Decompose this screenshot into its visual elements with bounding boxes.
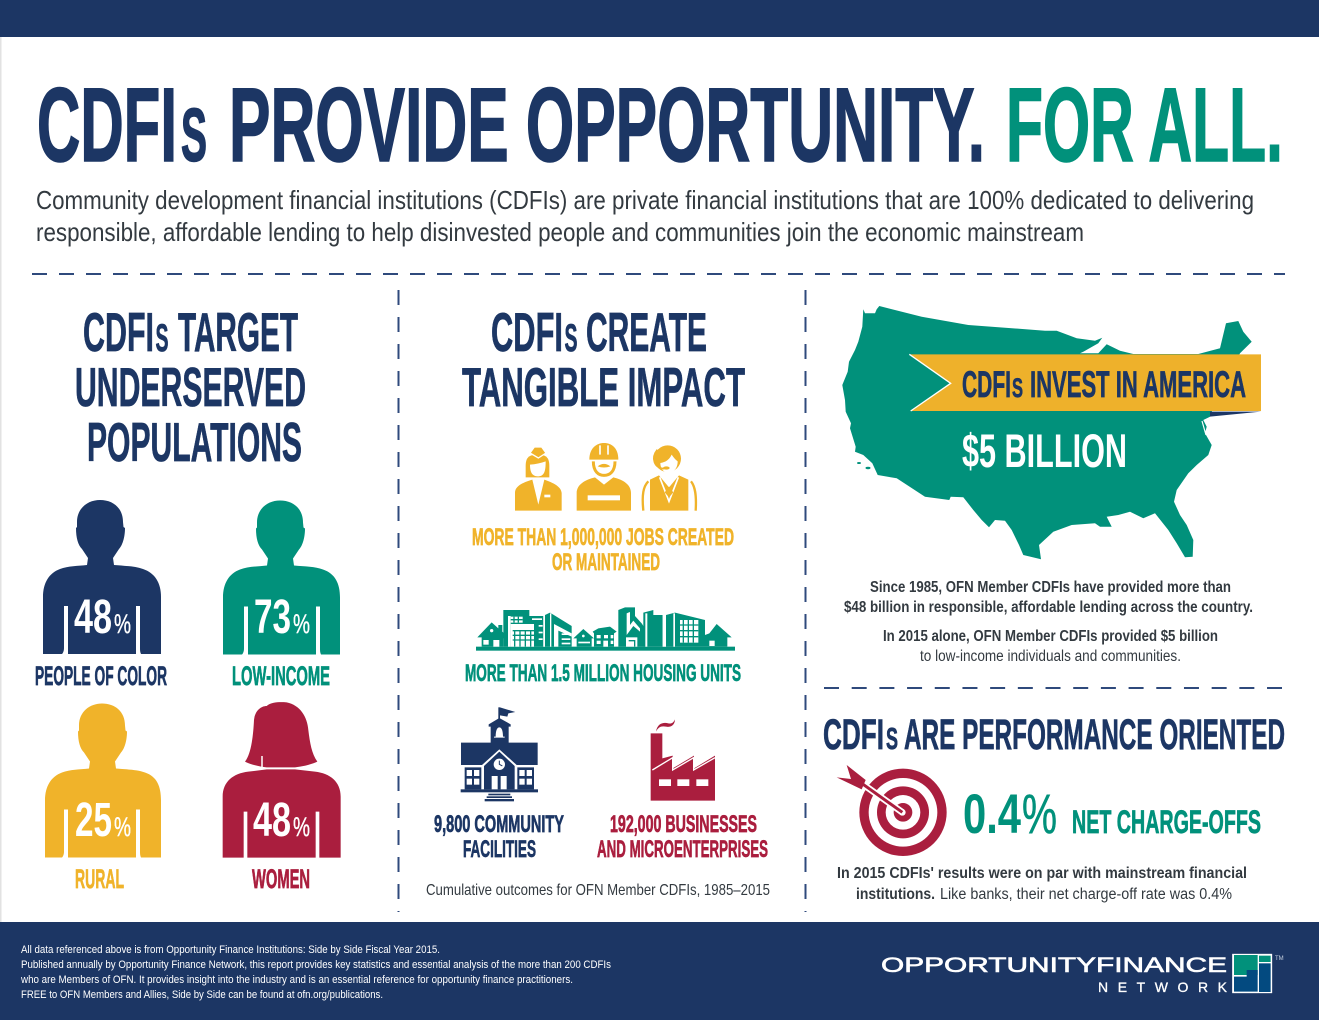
- footer text: All data referenced above is from Opportunity Finance Institutions: Side by Side Fiscal Year 2015.: [21, 944, 440, 956]
- intro text: [36, 185, 1254, 247]
- stat: low-income 73%: [223, 500, 340, 691]
- text: lending summary: to low-income individuals and communities.: [920, 648, 1181, 665]
- logo: Opportunity Finance Network: OPPORTUNITYFINANCE: [881, 954, 1227, 977]
- panel: tangible impact: [426, 301, 770, 899]
- label: businesses: AND MICROENTERPRISES: [597, 836, 768, 863]
- stat: women 48%: 48: [253, 794, 291, 847]
- text: performance note: Like banks, their net charge-off rate was 0.4%: [940, 886, 1232, 903]
- footer text: Published annually by Opportunity Finance Network, this report provides key statistics and essential analysis of the more than 200 CDFIs: [21, 959, 611, 971]
- heading: performance oriented: S: [886, 721, 898, 756]
- figure: 0.4%: 0.4: [963, 782, 1021, 845]
- stat: women 48%: %: [293, 812, 310, 842]
- heading: target underserved populations: UNDERSERVED: [75, 356, 306, 418]
- footer band: [0, 922, 1319, 1020]
- stat: people of color 48%: [35, 500, 167, 691]
- text: lending summary: [844, 579, 1253, 665]
- stat: women 48%: WOMEN: [252, 864, 310, 894]
- heading: target underserved populations: S: [156, 317, 168, 360]
- panel: target populations: [35, 301, 341, 894]
- icon: three workers: [515, 443, 696, 511]
- text: performance note: institutions.: [856, 886, 935, 903]
- map: United States: [842, 306, 1252, 559]
- stat: low-income 73%: %: [293, 609, 310, 639]
- stat: low-income 73%: 73: [254, 591, 291, 644]
- banner text: [962, 364, 1246, 405]
- label: community facilities: [434, 811, 564, 863]
- logo: Opportunity Finance Network: TM: [1275, 956, 1284, 962]
- heading: target underserved populations: [75, 301, 306, 473]
- stat: low-income 73%: LOW-INCOME: [232, 661, 330, 691]
- title: S: [181, 93, 207, 177]
- heading: tangible impact: TANGIBLE IMPACT: [462, 356, 745, 418]
- label: community facilities: 9,800 COMMUNITY: [434, 811, 564, 838]
- intro text: responsible, affordable lending to help disinvested people and communities join the economic mainstream: [36, 217, 1084, 247]
- banner: CDFIs invest in America: [909, 354, 1261, 417]
- icon: school building: [461, 707, 538, 801]
- stat: people of color 48%: PEOPLE OF COLOR: [35, 661, 167, 691]
- stat: rural 25%: %: [114, 812, 131, 842]
- heading: target underserved populations: POPULATIONS: [87, 411, 302, 473]
- heading: tangible impact: CREATE: [586, 301, 707, 363]
- stat: people of color 48%: 48: [74, 591, 112, 644]
- stat: women 48%: [223, 702, 341, 894]
- footer text: [20, 944, 611, 1001]
- banner text: S: [1012, 373, 1023, 403]
- label: housing units: MORE THAN 1.5 MILLION HOUSING UNITS: [465, 660, 741, 687]
- label: jobs: [472, 524, 734, 576]
- heading: tangible impact: S: [564, 317, 578, 360]
- icon: target with arrow: [837, 765, 947, 856]
- label: community facilities: FACILITIES: [463, 836, 536, 863]
- text: performance note: [837, 865, 1247, 903]
- stat: rural 25%: 25: [75, 794, 112, 847]
- heading: tangible impact: CDFI: [491, 301, 563, 363]
- heading: performance oriented: CDFI: [823, 711, 884, 759]
- label: businesses: [597, 811, 768, 863]
- stat: people of color 48%: %: [114, 609, 131, 639]
- panel: invest in America: [842, 306, 1261, 665]
- icon: factory: [651, 719, 715, 801]
- footer text: who are Members of OFN. It provides insight into the industry and is an essential reference for opportunity finance practitioners.: [20, 974, 573, 986]
- title: CDFI: [37, 67, 177, 184]
- icon: housing skyline: [476, 607, 735, 651]
- panel: performance oriented: [823, 711, 1285, 903]
- text: lending summary: $48 billion in responsible, affordable lending across the country.: [844, 599, 1253, 616]
- heading: tangible impact: [462, 301, 745, 418]
- label: jobs: MORE THAN 1,000,000 JOBS CREATED: [472, 524, 734, 551]
- top band: [0, 0, 1319, 37]
- logo: Opportunity Finance Network: [881, 954, 1284, 995]
- stat: rural 25%: RURAL: [75, 864, 124, 894]
- label: businesses: 192,000 BUSINESSES: [610, 811, 757, 838]
- banner text: CDFI: [962, 364, 1011, 405]
- footer text: FREE to OFN Members and Allies, Side by Side can be found at ofn.org/publications.: [21, 989, 383, 1001]
- note: cumulative outcomes: Cumulative outcomes for OFN Member CDFIs, 1985–2015: [426, 882, 770, 899]
- label: jobs: OR MAINTAINED: [552, 549, 660, 576]
- figure: $5 billion: $5 BILLION: [962, 424, 1127, 477]
- figure: 0.4%: %: [1022, 782, 1057, 845]
- text: performance note: In 2015 CDFIs' results were on par with mainstream financial: [837, 865, 1247, 882]
- stat: rural 25%: [45, 704, 161, 894]
- heading: target underserved populations: CDFI: [83, 301, 154, 363]
- heading: target underserved populations: TARGET: [178, 301, 298, 363]
- text: lending summary: In 2015 alone, OFN Member CDFIs provided $5 billion: [883, 628, 1218, 645]
- text: lending summary: Since 1985, OFN Member CDFIs have provided more than: [870, 579, 1231, 596]
- logo: Opportunity Finance Network: NETWORK: [1098, 979, 1228, 995]
